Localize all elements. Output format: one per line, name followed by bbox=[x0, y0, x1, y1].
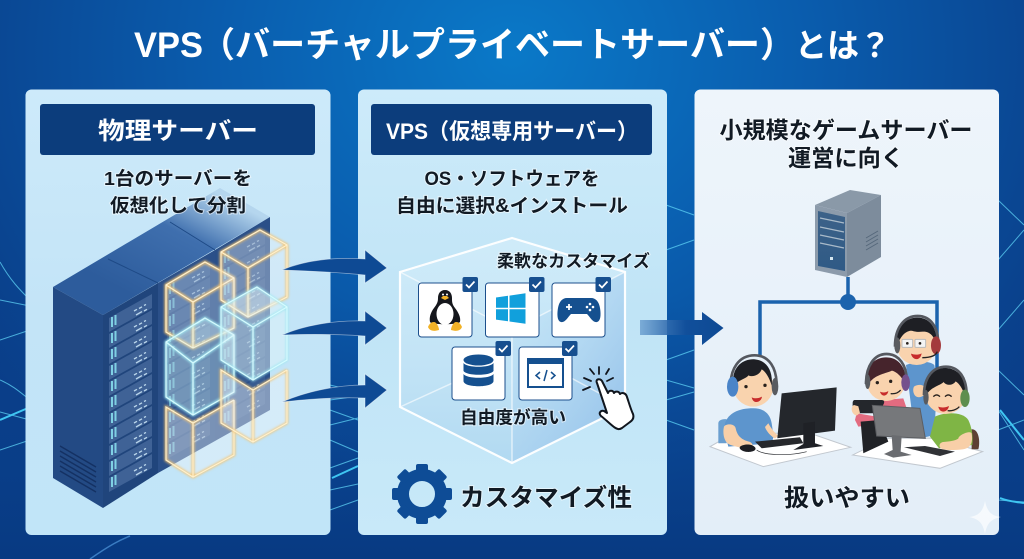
icon: pointing hand bbox=[583, 367, 633, 429]
panel: VPS bbox=[358, 90, 667, 535]
panel: easy to handle bbox=[694, 90, 1001, 535]
cube: blue middle left bbox=[166, 318, 234, 415]
icon: gear bbox=[392, 464, 452, 524]
header: physical server: 物理サーバー bbox=[98, 118, 258, 145]
heading: suited to small game servers: 運営に向く bbox=[788, 145, 904, 171]
check badge bbox=[529, 277, 544, 292]
arrow: server to VPS top bbox=[282, 250, 387, 283]
description: free choice of OS and software: OS・ソフトウェアを bbox=[424, 168, 600, 190]
desk left bbox=[710, 433, 851, 467]
icon: Windows bbox=[486, 283, 539, 337]
cube: orange bottom right bbox=[221, 370, 287, 442]
server rack illustration bbox=[53, 188, 270, 508]
check badge bbox=[496, 341, 511, 356]
check badge bbox=[562, 341, 578, 356]
person: standing gamer with glasses bbox=[894, 316, 941, 438]
heading: suited to small game servers bbox=[720, 117, 972, 171]
description: split one server: 1台のサーバーを bbox=[104, 168, 252, 189]
label: customizability: カスタマイズ性 bbox=[460, 483, 632, 512]
cube: orange top right bbox=[221, 230, 287, 317]
header: physical server bbox=[40, 104, 315, 155]
icon: code window bbox=[519, 347, 572, 400]
arrow: VPS to easy handling bbox=[640, 312, 724, 345]
person: girl with tablet bbox=[852, 354, 910, 427]
cube: orange top left bbox=[166, 262, 234, 348]
title: VPS bbox=[134, 26, 203, 65]
description: split one server: 仮想化して分割 bbox=[110, 195, 246, 216]
header: VPS: VPS（仮想専用サーバー） bbox=[386, 119, 638, 144]
icon: tower server bbox=[815, 190, 881, 277]
title: （バーチャルプライベートサーバー） bbox=[200, 26, 795, 65]
desk right bbox=[853, 438, 983, 468]
description: split one server bbox=[104, 168, 252, 216]
sparkle mark bbox=[969, 501, 1001, 534]
label: flexible customization: 柔軟なカスタマイズ bbox=[497, 251, 650, 271]
virtualized cubes bbox=[166, 230, 287, 477]
icon: Linux penguin bbox=[418, 283, 472, 337]
heading: suited to small game servers: 小規模なゲームサーバー bbox=[720, 117, 972, 143]
description: free choice of OS and software bbox=[396, 168, 628, 217]
panel: physical server bbox=[26, 90, 330, 535]
icon: game controller bbox=[552, 283, 605, 337]
gray monitor and PC bbox=[861, 405, 955, 458]
monitor left bbox=[755, 387, 837, 455]
title: とは？ bbox=[795, 27, 891, 64]
cube: orange bottom left bbox=[166, 400, 234, 477]
arrow: server to VPS middle bbox=[282, 311, 387, 345]
icon cards bbox=[418, 277, 611, 400]
header: VPS bbox=[371, 104, 652, 155]
network lines bbox=[760, 277, 937, 370]
icon: database bbox=[452, 347, 505, 400]
check badge bbox=[596, 277, 611, 292]
label: high freedom: 自由度が高い bbox=[460, 408, 566, 428]
arrow: server to VPS bottom bbox=[282, 374, 387, 408]
illustration: gamers at desks bbox=[710, 316, 983, 468]
cube: blue middle right bbox=[221, 287, 287, 380]
hexagon container bbox=[400, 238, 625, 463]
description: free choice of OS and software: 自由に選択&インストール bbox=[396, 195, 628, 217]
person: right gamer in green bbox=[923, 367, 979, 450]
person: left gamer bbox=[718, 355, 778, 452]
check badge bbox=[462, 277, 478, 292]
label: easy to handle: 扱いやすい bbox=[784, 485, 910, 512]
